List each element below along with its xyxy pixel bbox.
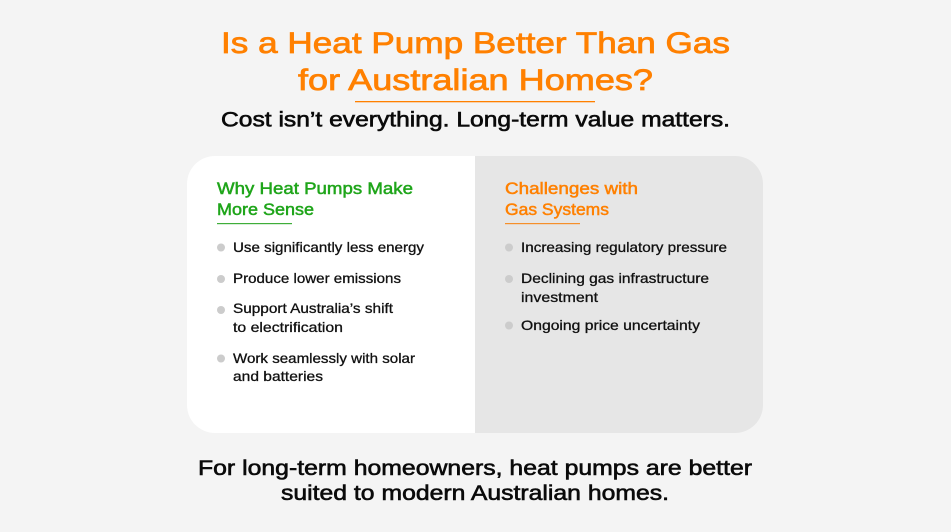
bullet: less energy: Use significantly less energy bbox=[233, 239, 424, 255]
title underline bbox=[355, 101, 595, 102]
conclusion text: For long-term homeowners, heat pumps are better bbox=[198, 457, 752, 480]
subtitle: Cost isn’t everything. Long-term value matters. bbox=[221, 108, 730, 132]
bullet: solar and batteries: Work seamlessly with solar bbox=[233, 350, 415, 366]
bullet: regulatory pressure: Increasing regulatory pressure bbox=[521, 239, 727, 255]
title: Is a Heat Pump Better Than Gas bbox=[221, 27, 730, 60]
comparison card bbox=[187, 156, 763, 433]
heading: why heat pumps bbox=[217, 180, 413, 219]
title bbox=[221, 27, 730, 97]
bullet: solar and batteries: and batteries bbox=[233, 368, 323, 384]
panel: why heat pumps make more sense bbox=[187, 156, 475, 433]
bullet: infrastructure investment: investment bbox=[521, 289, 598, 305]
bullet: electrification: Support Australia’s shift bbox=[233, 300, 393, 316]
bullet: price uncertainty: Ongoing price uncertainty bbox=[521, 317, 700, 333]
bullet: lower emissions: Produce lower emissions bbox=[233, 270, 401, 286]
bullet: infrastructure investment bbox=[505, 270, 709, 305]
heading: why heat pumps: More Sense bbox=[217, 201, 314, 219]
conclusion text bbox=[198, 457, 752, 505]
title: for Australian Homes? bbox=[298, 64, 653, 97]
conclusion text: suited to modern Australian homes. bbox=[281, 482, 669, 505]
bullet: electrification bbox=[217, 300, 393, 335]
heading: challenges: Challenges with bbox=[505, 180, 638, 198]
bullet: solar and batteries bbox=[217, 350, 415, 384]
heading underline: orange bbox=[505, 223, 580, 224]
heading: why heat pumps: Why Heat Pumps Make bbox=[217, 180, 413, 198]
heading: challenges: Gas Systems bbox=[505, 201, 609, 219]
bullet: electrification: to electrification bbox=[233, 319, 343, 335]
heading underline: green bbox=[217, 223, 292, 224]
bullet: infrastructure investment: Declining gas infrastructure bbox=[521, 270, 709, 286]
heading: challenges bbox=[505, 180, 638, 219]
panel: challenges with gas systems bbox=[475, 156, 763, 433]
